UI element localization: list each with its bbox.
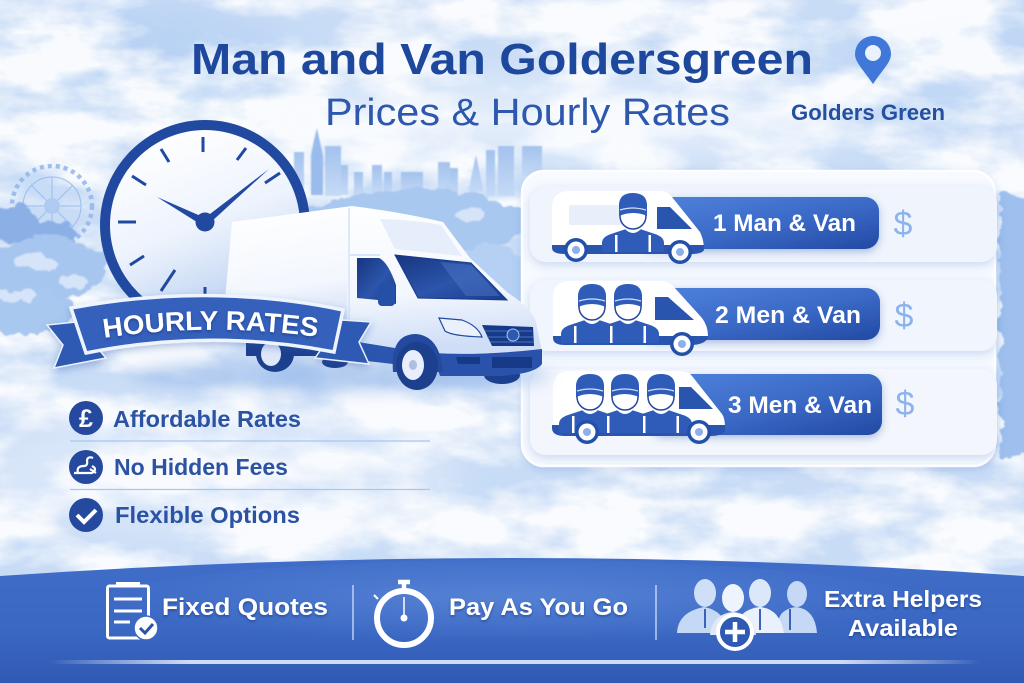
van 2 bbox=[553, 281, 708, 356]
van ground shadow bbox=[130, 359, 550, 391]
benefit: affordable rates: £ bbox=[79, 405, 93, 433]
clock bbox=[100, 120, 310, 330]
clock hands bbox=[157, 169, 269, 232]
city skyline bbox=[294, 128, 542, 196]
pay as you go label: Pay As You Go bbox=[449, 594, 628, 621]
trees on the left bbox=[0, 204, 107, 334]
extra helpers label bbox=[824, 586, 982, 641]
title bbox=[191, 35, 813, 134]
hourly rates ribbon bbox=[44, 292, 374, 375]
clipboard icon bbox=[108, 582, 158, 640]
row 1: 1 Man & Van bbox=[713, 210, 856, 237]
row 3: 3 Men & Van bbox=[728, 392, 872, 419]
pricing panel bbox=[522, 171, 997, 466]
benefit: flexible options: Flexible Options bbox=[115, 502, 300, 528]
location label: Golders Green bbox=[791, 100, 945, 125]
row 2: 2 Men & Van bbox=[715, 302, 861, 329]
front wheel bbox=[393, 334, 443, 390]
ribbon label: HOURLY RATES bbox=[102, 311, 318, 340]
helpers icon bbox=[677, 579, 817, 649]
lower blue trim bbox=[358, 342, 395, 364]
wing mirror bbox=[378, 283, 395, 306]
ferris wheel landmark bbox=[12, 166, 92, 246]
benefit: affordable rates bbox=[69, 401, 301, 435]
ribbon right tail bbox=[315, 320, 371, 364]
rear wheel bbox=[246, 336, 520, 384]
van 3 bbox=[552, 371, 725, 444]
band dividers bbox=[353, 585, 656, 640]
bottom band bbox=[0, 558, 1024, 683]
grille bbox=[482, 325, 534, 346]
title: Man and Van Goldersgreen bbox=[191, 35, 813, 84]
subtitle: Prices & Hourly Rates bbox=[325, 92, 730, 134]
large white van bbox=[225, 206, 542, 390]
windshield bbox=[395, 255, 507, 300]
fixed quotes label: Fixed Quotes bbox=[162, 594, 328, 621]
side window bbox=[357, 258, 396, 304]
benefit: no hidden fees bbox=[69, 450, 288, 484]
benefit: flexible options bbox=[69, 498, 300, 532]
van body bbox=[225, 206, 542, 358]
van 1 bbox=[552, 191, 704, 264]
extra helpers label: Extra Helpers bbox=[824, 586, 982, 612]
row 2 bbox=[530, 280, 997, 356]
row 2: $ bbox=[895, 297, 914, 335]
row 3: $ bbox=[896, 385, 915, 423]
row 1 bbox=[530, 187, 997, 264]
headlight bbox=[439, 318, 482, 337]
extra helpers label: Available bbox=[848, 615, 958, 641]
row 3 bbox=[530, 369, 997, 455]
benefit: no hidden fees: No Hidden Fees bbox=[114, 454, 288, 480]
ribbon left tail bbox=[47, 322, 106, 368]
stopwatch icon bbox=[374, 582, 431, 645]
location pin icon bbox=[855, 36, 891, 84]
wooded area behind van bbox=[300, 190, 530, 318]
row 1: $ bbox=[894, 205, 913, 243]
benefits list bbox=[69, 401, 430, 532]
ribbon band bbox=[71, 295, 343, 353]
benefit: affordable rates: Affordable Rates bbox=[113, 406, 301, 432]
